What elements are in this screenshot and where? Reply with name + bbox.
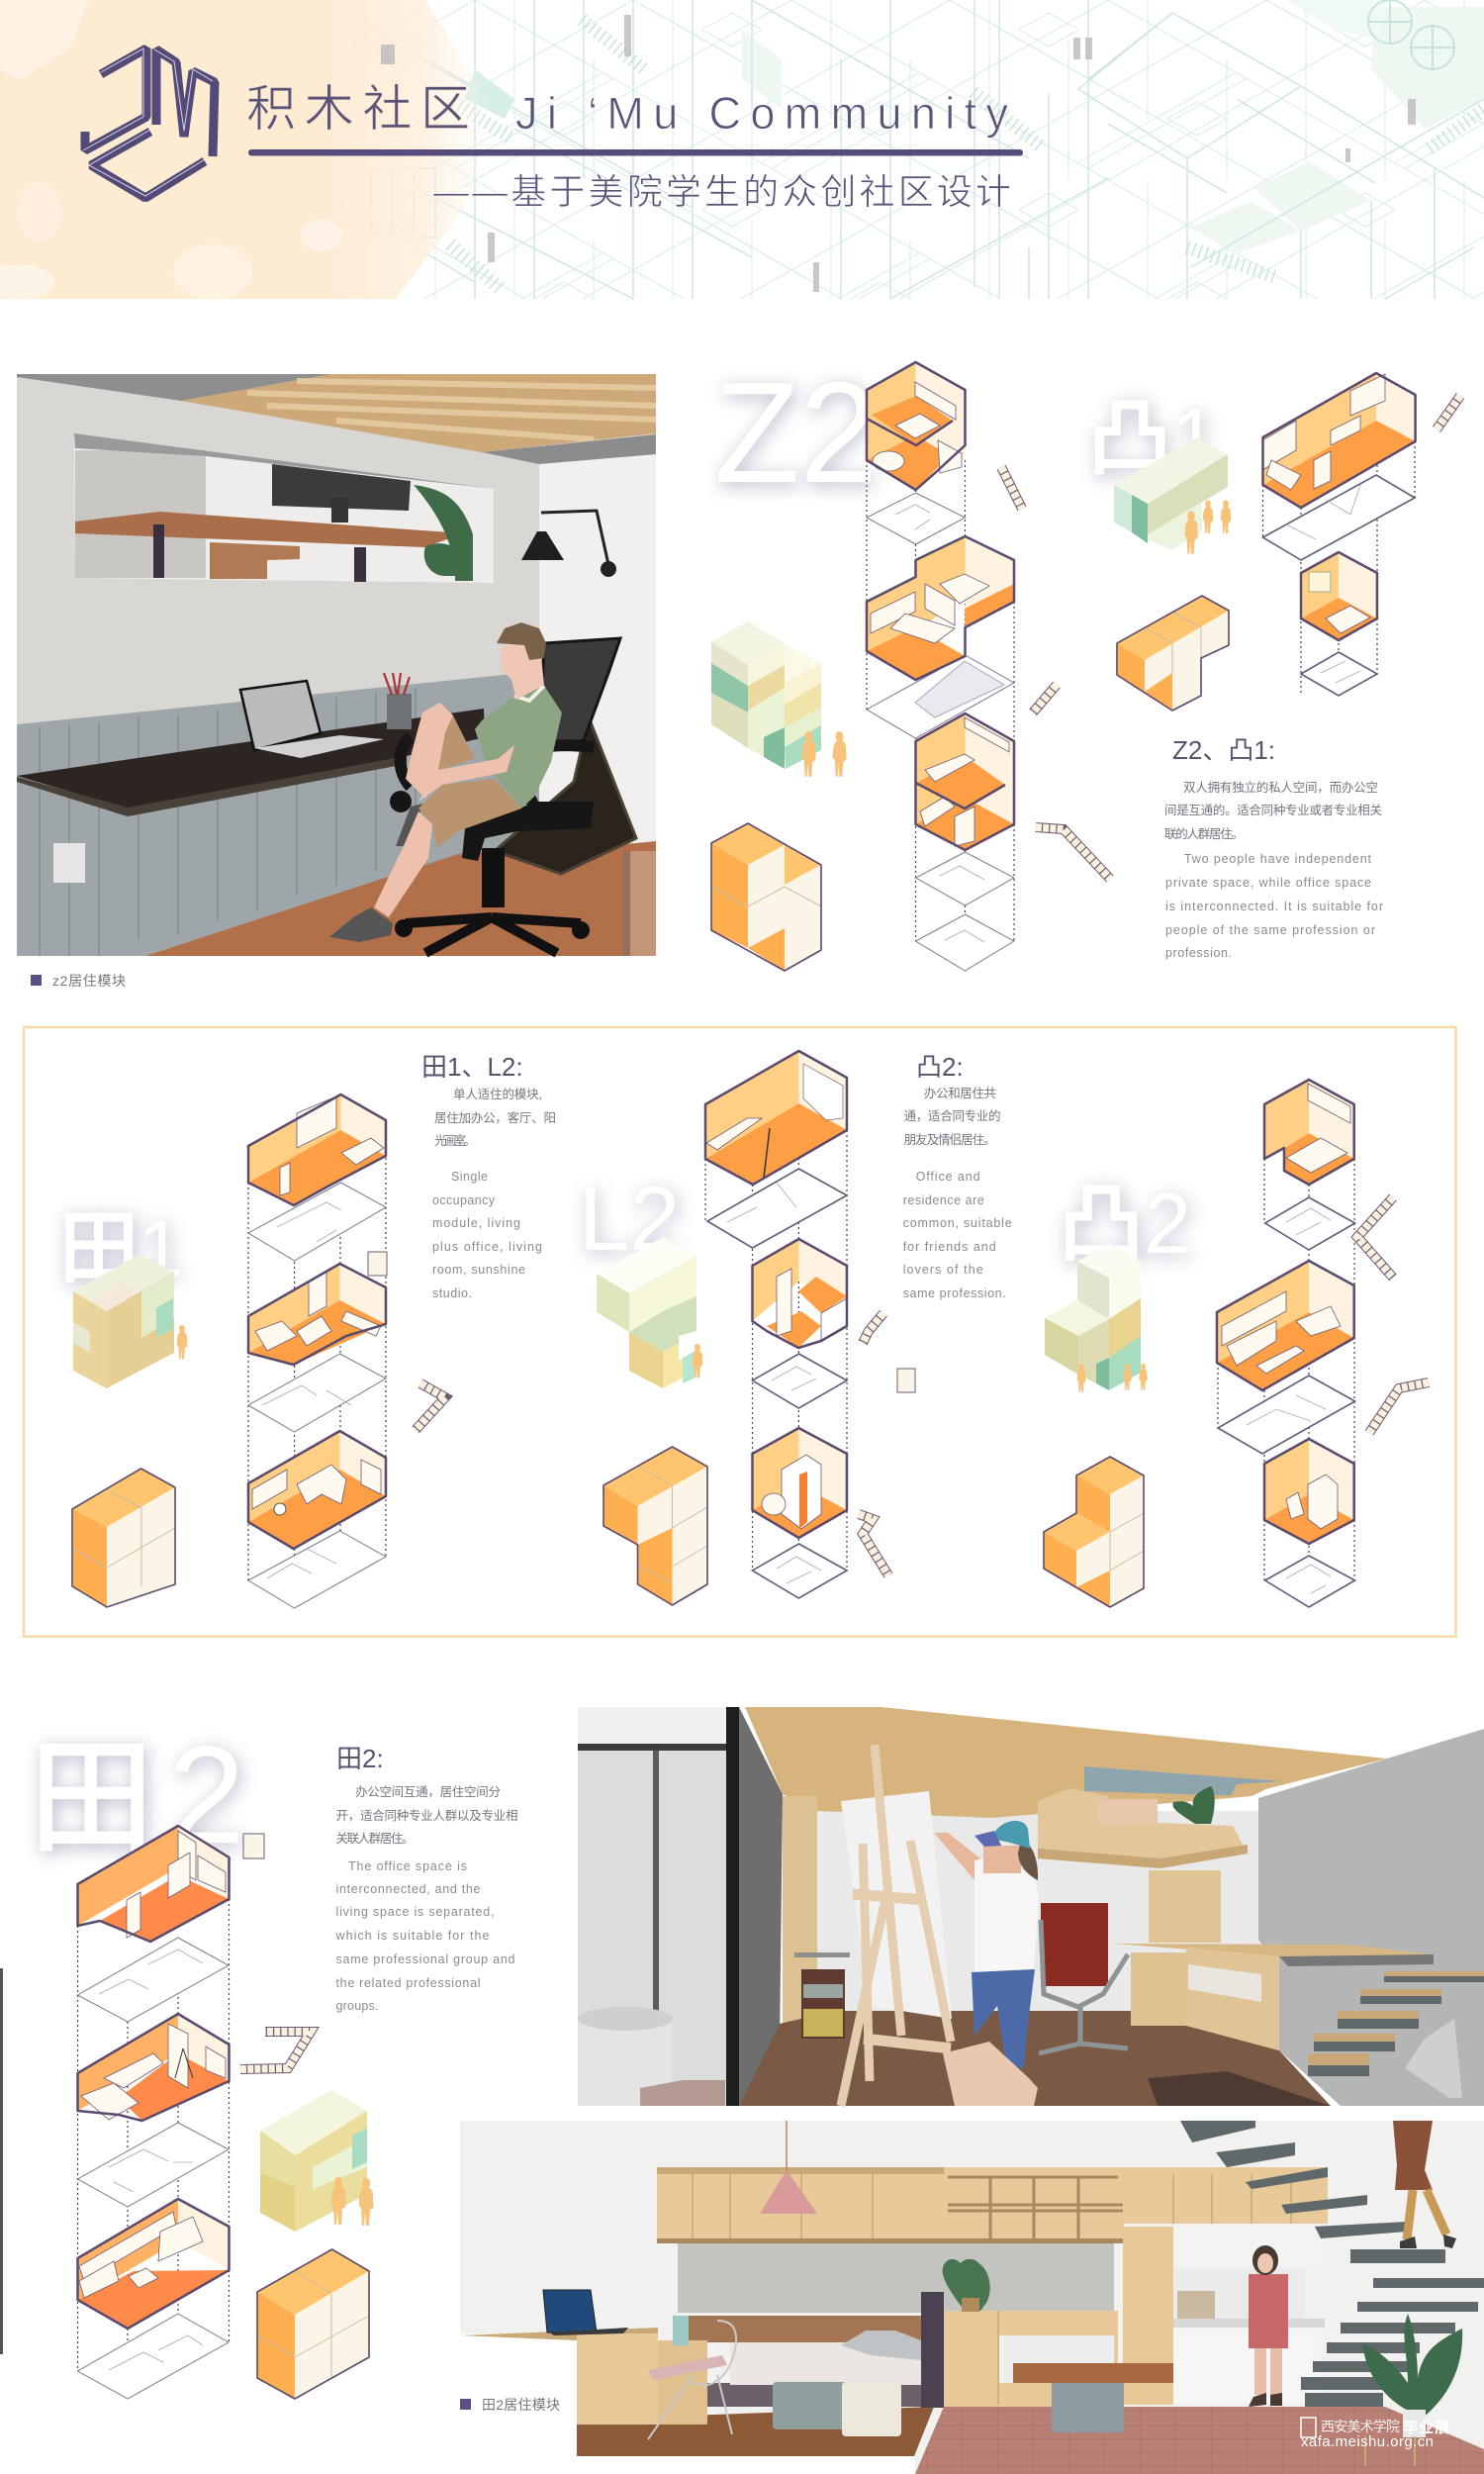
- room: 凸2 kitchen: [1217, 1261, 1354, 1390]
- module Z2: orange cube: [711, 823, 821, 971]
- ghost label: L2: L2: [579, 1169, 680, 1270]
- text block: 田2: same professional group and: [336, 1952, 515, 1966]
- 田2 exploded axonometric: [77, 1826, 311, 2399]
- stairs: [1357, 1197, 1393, 1278]
- chair and seated figure: [329, 622, 636, 953]
- title rule: [248, 149, 1023, 156]
- Z2 exploded axonometric: [867, 362, 1110, 971]
- plan 1: [867, 493, 966, 544]
- text block: 田2: The office space is: [348, 1859, 467, 1873]
- module 田1: orange cube: [72, 1469, 175, 1607]
- caption: 田2 module: 田2居住模块: [482, 2397, 560, 2413]
- room: L2 middle: [752, 1239, 847, 1348]
- plan: [1265, 1556, 1355, 1607]
- text block: 凸2: 通，适合同专业的: [904, 1108, 1001, 1123]
- watermark: 毕业展: [1403, 2420, 1449, 2436]
- watermark: 西安美术学院: [1321, 2419, 1400, 2434]
- text block: 田2: living space is separated,: [336, 1905, 495, 1919]
- ghost label: 凸1: 凸1: [1088, 392, 1218, 485]
- edge strip: [0, 1968, 3, 2354]
- 田1 exploded axonometric: [248, 1094, 445, 1608]
- L2 exploded axonometric: [705, 1051, 915, 1598]
- text block: 田2: 关联人群居住。: [336, 1832, 414, 1846]
- icon: shelf: [368, 1252, 387, 1276]
- header banner: [0, 0, 1484, 300]
- room: 田2 middle: [77, 2014, 230, 2121]
- stairs: [416, 1383, 445, 1430]
- text block: 田1 L2: module, living: [432, 1216, 520, 1230]
- room: office level: [916, 714, 1014, 850]
- text block: 田2: [334, 1744, 518, 2013]
- text block: Z2 凸1: Z2、凸1:: [1172, 735, 1275, 765]
- plan 3a: [916, 852, 1014, 905]
- text block: 田1 L2: 居住加办公，客厅、阳: [434, 1110, 556, 1125]
- stairs: [1033, 685, 1057, 713]
- module 田1: color volume: [73, 1254, 187, 1388]
- 凸1 exploded axonometric: [1262, 373, 1460, 696]
- text block: 凸2: 凸2:: [916, 1052, 964, 1082]
- room: L2 lower: [752, 1428, 847, 1538]
- icon: figures: [1184, 501, 1231, 554]
- text block: 田2: the related professional: [336, 1976, 481, 1990]
- room: 田2 lower: [77, 2199, 230, 2329]
- module Z2: color volume: [711, 621, 847, 777]
- text block: Z2 凸1: [1164, 735, 1383, 960]
- photo: z2 workspace render: [17, 374, 656, 956]
- text block: Z2 凸1: 间是互通的。适合同种专业或者专业相关: [1164, 803, 1382, 817]
- stairs: [1437, 396, 1460, 429]
- icon: shelf: [897, 1369, 915, 1392]
- panel: middle modules frame: [24, 1027, 1456, 1637]
- plan 2: [867, 655, 1014, 738]
- module 凸2: color volume: [1045, 1243, 1148, 1392]
- icon: shelf: [243, 1834, 264, 1858]
- room: bedroom: [1301, 552, 1377, 640]
- text block: 田2: 田2:: [336, 1744, 384, 1773]
- text block: 凸2: 办公和居住共: [924, 1086, 996, 1100]
- text block: Z2 凸1: private space, while office space: [1165, 876, 1371, 890]
- text block: 凸2: Office and: [916, 1170, 980, 1184]
- text block: 田1 L2: 田1、L2:: [421, 1052, 523, 1082]
- ghost label: 田1: 田1: [59, 1204, 182, 1292]
- plan: [752, 1544, 847, 1598]
- watermark: [1301, 2418, 1449, 2450]
- icon: figures: [331, 2177, 373, 2226]
- room: studio level: [867, 536, 1014, 680]
- text block: 凸2: same profession.: [903, 1286, 1006, 1300]
- room: 凸2 lower: [1264, 1439, 1354, 1544]
- text block: 田1 L2: room, sunshine: [432, 1263, 525, 1277]
- text block: 凸2: for friends and: [903, 1240, 996, 1254]
- ghost label: Z2: Z2: [714, 352, 878, 513]
- text block: 田1 L2: [421, 1052, 556, 1300]
- photo: studio render: [578, 1707, 1484, 2106]
- ghost label: 田2: 田: [30, 1730, 153, 1867]
- text block: 田1 L2: occupancy: [432, 1193, 496, 1207]
- plan: [248, 1354, 386, 1432]
- text block: 凸2: [903, 1052, 1012, 1300]
- room: L2 top: [705, 1051, 847, 1185]
- text block: Z2 凸1: profession.: [1165, 946, 1232, 960]
- icon: figures: [801, 731, 847, 777]
- stairs: [1369, 1382, 1429, 1433]
- room: loft bedroom: [867, 362, 966, 490]
- text block: 凸2: common, suitable: [903, 1216, 1012, 1230]
- plan: [248, 1531, 386, 1608]
- stairs: [1036, 827, 1110, 879]
- ghost label: 田2: 2: [168, 1717, 245, 1872]
- plan: long unit: [1262, 475, 1415, 560]
- text block: 田2: which is suitable for the: [334, 1929, 490, 1943]
- plan: [752, 1354, 847, 1408]
- room: 田1 middle: [248, 1264, 386, 1365]
- text block: 田1 L2: plus office, living: [432, 1240, 542, 1254]
- plan: [707, 1169, 847, 1248]
- text block: 凸2: 朋友及情侣居住。: [904, 1132, 996, 1147]
- icon: figure: [177, 1325, 187, 1360]
- text block: 田1 L2: Single: [451, 1170, 488, 1184]
- module 凸1: orange cube: [1117, 596, 1229, 711]
- ghost label: 凸2: 凸2: [1059, 1177, 1191, 1272]
- module L2: color volume: [597, 1237, 702, 1388]
- room: 凸2 top: [1264, 1080, 1354, 1185]
- plan: [1265, 1197, 1355, 1250]
- plan: [77, 2123, 229, 2207]
- icon: figure: [693, 1344, 702, 1379]
- text block: 田1 L2: 单人适住的模块,: [453, 1087, 542, 1101]
- room: long unit: [1262, 373, 1416, 508]
- room: 田2 top: [77, 1826, 230, 1942]
- text block: Z2 凸1: Two people have independent: [1184, 852, 1372, 866]
- module 田2: orange cube: [257, 2249, 369, 2399]
- text block: Z2 凸1: people of the same profession or: [1165, 923, 1375, 937]
- plan: [77, 2314, 229, 2399]
- watermark: xafa.meishu.org.cn: [1301, 2433, 1434, 2450]
- ghost label: 田2: [30, 1717, 245, 1872]
- plan: [248, 1183, 386, 1261]
- subtitle: ——基于美院学生的众创社区设计: [433, 171, 1011, 212]
- module 凸2: orange cube: [1044, 1457, 1144, 1607]
- plan 3b: [916, 914, 1014, 971]
- plan: [1218, 1376, 1355, 1454]
- stairs: [1001, 467, 1022, 509]
- module L2: orange cube: [603, 1447, 707, 1605]
- text block: 田1 L2: 光画室。: [434, 1133, 476, 1148]
- photo: living module render: [460, 2121, 1484, 2474]
- stairs: [859, 1514, 888, 1575]
- module 凸1: color volume: [1114, 437, 1231, 554]
- plan: bedroom: [1301, 652, 1377, 696]
- room: 田1 top: [248, 1094, 386, 1205]
- text block: Z2 凸1: is interconnected. It is suitable for: [1165, 900, 1383, 913]
- text block: 田2: 开，适合同种专业人群以及专业相: [336, 1808, 518, 1823]
- stairs: [863, 1313, 883, 1343]
- text block: 田2: groups.: [336, 1999, 378, 2013]
- icon: figures: [1077, 1364, 1148, 1392]
- text block: Z2 凸1: 联的人群居住。: [1164, 826, 1244, 841]
- caption: z2 module: z2居住模块: [52, 973, 126, 989]
- text block: Z2 凸1: 双人拥有独立的私人空间，而办公空: [1183, 780, 1378, 795]
- text block: 田2: interconnected, and the: [336, 1882, 481, 1896]
- text block: 凸2: lovers of the: [903, 1263, 983, 1277]
- stairs: [240, 2032, 311, 2069]
- 凸2 exploded axonometric: [1217, 1080, 1429, 1607]
- logo: 2JM mark: [83, 48, 215, 198]
- text block: 田2: 办公空间互通，居住空间分: [355, 1784, 501, 1799]
- text block: 凸2: residence are: [903, 1193, 984, 1207]
- title: English: Ji ‘Mu Community: [515, 88, 1009, 139]
- plan: [77, 1938, 229, 2022]
- title: Chinese: 积木社区: [246, 81, 470, 137]
- room: 田1 lower: [248, 1431, 386, 1549]
- text block: 田1 L2: studio.: [432, 1286, 472, 1300]
- module 田2: color volume: [260, 2090, 373, 2232]
